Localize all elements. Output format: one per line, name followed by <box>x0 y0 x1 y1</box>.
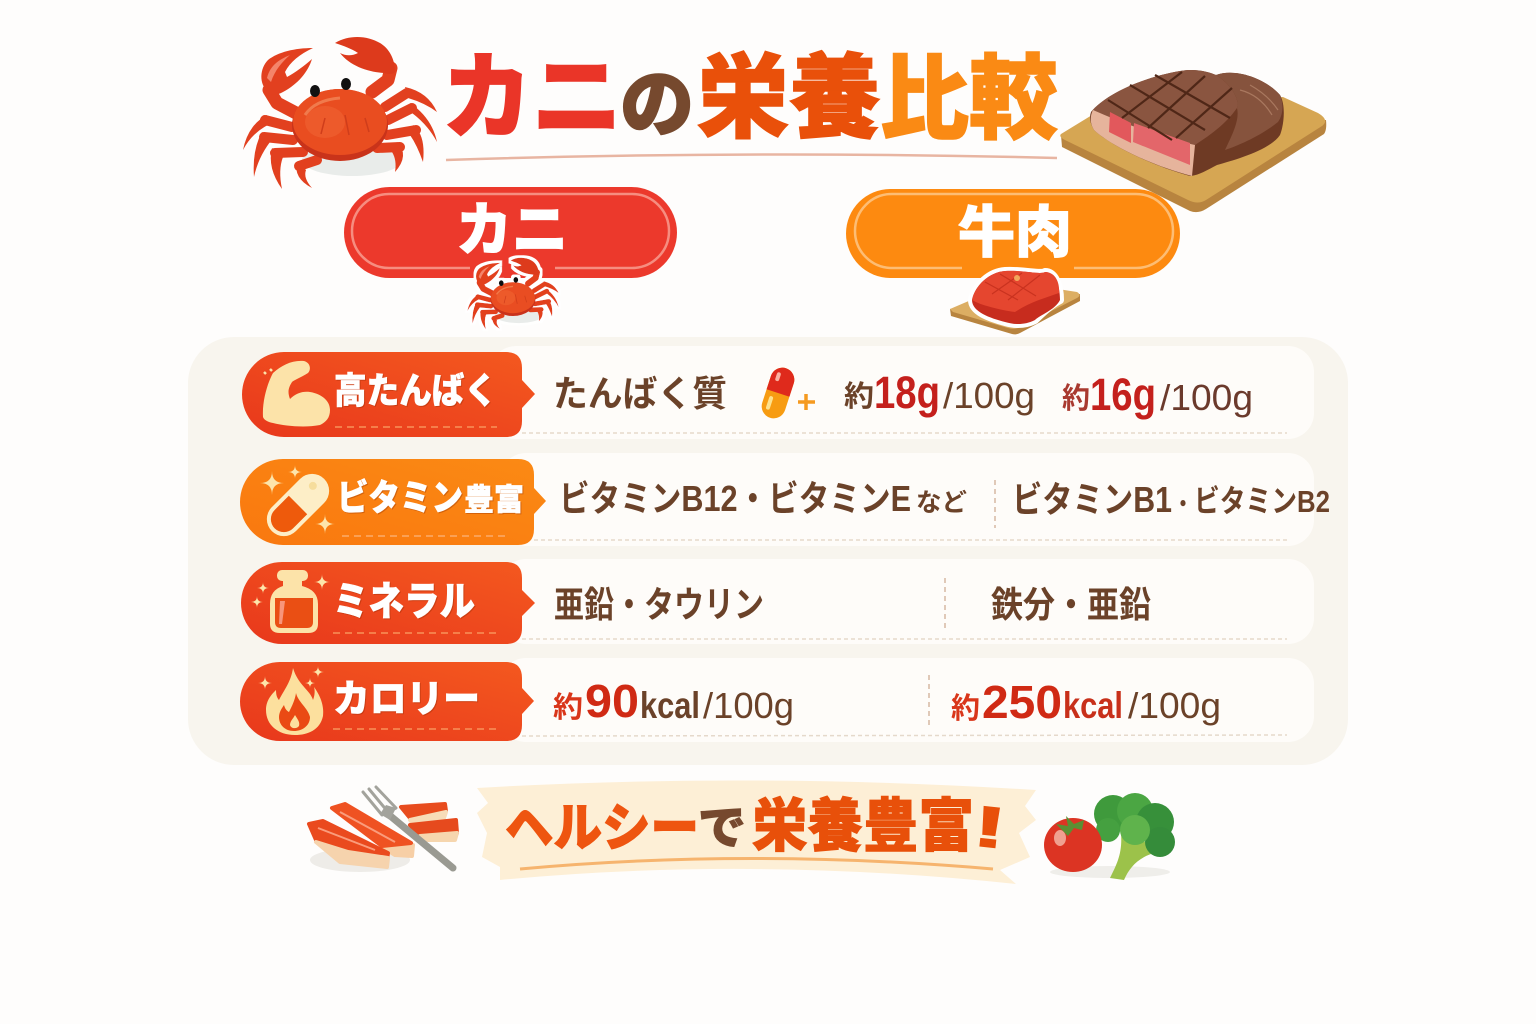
text: beef minerals: 鉄分・亜鉛 <box>991 584 1151 625</box>
icon: mineral bottle <box>251 570 330 633</box>
icon: tomato and broccoli <box>1044 793 1175 880</box>
value: beef protein <box>1062 369 1253 420</box>
text: beef vitamins: ビタミンB2 <box>1194 484 1330 519</box>
banner text <box>505 793 1010 862</box>
label: calories <box>240 662 534 741</box>
banner text: 栄養豊富 <box>752 794 974 859</box>
row 1: protein <box>242 346 1314 439</box>
icon: vitamin capsule <box>260 465 336 543</box>
banner text: ヘルシー <box>505 800 699 858</box>
value: beef calories <box>951 676 1221 728</box>
fork <box>388 814 453 868</box>
value: beef protein: /100g <box>1160 377 1253 418</box>
text: crab vitamins: ビタミンB12・ビタミンE <box>559 478 911 519</box>
text: beef vitamins <box>1012 479 1330 520</box>
pill label: beef: 牛肉 <box>958 201 1072 264</box>
icon: large steak on board <box>1060 70 1326 212</box>
pill: beef heading <box>846 189 1180 278</box>
value: crab protein: /100g <box>943 375 1035 416</box>
text: crab vitamins: など <box>916 489 967 517</box>
label: rich in vitamins: ビタミン <box>337 477 463 518</box>
panel: comparison table <box>188 337 1348 765</box>
value: beef calories: 250 <box>982 676 1062 728</box>
icon: flame <box>258 666 324 735</box>
pill: crab heading <box>344 187 677 278</box>
value: crab calories: 90 <box>585 675 639 727</box>
text: beef vitamins: ・ <box>1173 491 1193 518</box>
icon: small steak on board <box>950 271 1080 334</box>
value: beef protein: 16g <box>1090 369 1156 420</box>
icon: muscle arm <box>263 361 330 426</box>
value: beef calories: /100g <box>1128 685 1221 726</box>
value: crab calories <box>553 675 794 727</box>
value: crab calories: 約 <box>553 691 583 724</box>
title: カニ <box>442 45 622 150</box>
label: calories: カロリー <box>333 679 480 721</box>
title underline <box>446 154 1057 160</box>
text: protein: たんばく質 <box>553 373 727 414</box>
label: rich in vitamins <box>240 459 546 545</box>
icon: crab sticks and fork <box>309 787 457 872</box>
row 3: minerals <box>241 559 1314 644</box>
value: beef protein: 約 <box>1062 382 1090 415</box>
row 2: vitamins <box>240 453 1330 546</box>
banner text: ! <box>969 793 1010 862</box>
label: high protein <box>242 352 535 437</box>
row 4: calories <box>240 658 1314 742</box>
icon: supplement capsule <box>759 365 815 421</box>
text: crab minerals: 亜鉛・タウリン <box>554 584 764 625</box>
label: minerals <box>241 562 535 644</box>
value: crab protein <box>844 367 1035 418</box>
title: 栄養 <box>697 48 881 150</box>
title: 比較 <box>880 49 1058 151</box>
value: crab protein: 18g <box>874 367 940 418</box>
value: beef calories: kcal <box>1063 685 1123 726</box>
label: rich in vitamins: 豊富 <box>464 484 524 517</box>
icon: large crab <box>243 37 437 189</box>
value: crab protein: 約 <box>844 380 874 413</box>
value: beef calories: 約 <box>951 692 980 725</box>
value: crab calories: kcal <box>640 685 700 726</box>
title <box>442 45 1058 151</box>
value: crab calories: /100g <box>703 685 794 726</box>
text: beef vitamins: ビタミンB1 <box>1012 479 1172 520</box>
label: minerals: ミネラル <box>333 580 475 624</box>
icon: small crab <box>467 258 559 329</box>
banner: healthy and nutritious <box>477 780 1036 884</box>
banner text: で <box>698 802 746 854</box>
label: high protein: 高たんばく <box>334 370 497 411</box>
pill label: crab: カニ <box>456 198 568 263</box>
title: の <box>620 63 694 146</box>
